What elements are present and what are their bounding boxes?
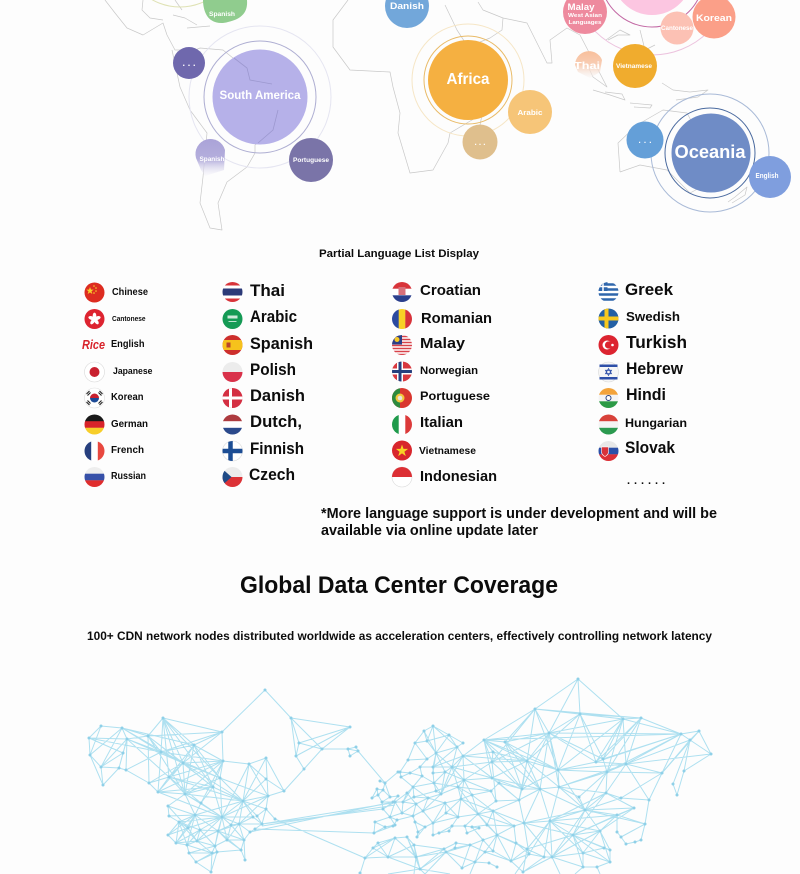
label: Indonesian: Indonesian — [420, 468, 497, 485]
bubble: ellipsis — [173, 47, 205, 79]
subtitle: CDN nodes: 100+ CDN network nodes distributed worldwide as acceleration centers, effectively controlling network latency — [87, 631, 713, 643]
flag: Turkey — [598, 335, 618, 355]
label: Romanian: Romanian — [421, 310, 492, 327]
flag: Finland — [222, 441, 242, 461]
bubble: ellipsis: ... — [474, 138, 486, 147]
footnote — [321, 505, 717, 539]
flag: Japan — [84, 362, 104, 382]
flag: Slovakia — [598, 441, 618, 461]
mark: Rice: Rice — [82, 338, 105, 352]
bubble: Vietnamese — [613, 44, 657, 88]
bubble: Thai — [574, 51, 602, 78]
label: Polish: Polish — [250, 361, 296, 379]
bubble: Malay: West Asian — [568, 13, 602, 19]
flag: China — [84, 282, 104, 302]
bubble group: South America — [173, 26, 333, 182]
bubble: Portuguese — [289, 138, 333, 182]
flag: Norway — [392, 362, 412, 382]
flag: Denmark — [222, 388, 242, 408]
heading: language list: Partial Language List Display — [319, 248, 480, 260]
bubble: Malay: Malay — [568, 2, 595, 13]
label: French: French — [111, 444, 144, 456]
label: Thai: Thai — [250, 282, 285, 300]
label: Greek: Greek — [625, 281, 674, 299]
title: data center coverage: Global Data Center Coverage — [240, 572, 558, 599]
bubble: Spanish: Spanish — [200, 156, 225, 163]
flag: Malaysia — [392, 335, 412, 355]
label: German: German — [111, 418, 148, 430]
bubble group: Africa: Africa — [446, 71, 490, 88]
language column 4 — [598, 281, 687, 487]
label: Arabic: Arabic — [250, 308, 297, 326]
ellipsis: more languages: ...... — [627, 475, 665, 487]
label: Korean: Korean — [111, 391, 144, 403]
label: Swedish: Swedish — [626, 309, 680, 324]
bubble: Portuguese: Portuguese — [293, 157, 329, 164]
flag: Saudi Arabia — [222, 309, 242, 329]
bubble: Vietnamese: Vietnamese — [616, 63, 652, 70]
label: Danish: Danish — [250, 387, 305, 405]
world map outline — [105, 0, 747, 230]
bubble: Korean — [692, 0, 736, 38]
bubble group: Oceania: Oceania — [674, 142, 746, 162]
flag: Netherlands — [222, 414, 242, 435]
bubble: Danish — [385, 0, 429, 28]
flag: Italy — [392, 414, 412, 434]
bubble: Danish: Danish — [390, 1, 424, 12]
label: Malay: Malay — [420, 335, 466, 352]
flag: Croatia — [392, 282, 412, 302]
bubble: English: English — [756, 173, 778, 180]
label: Portuguese: Portuguese — [420, 389, 490, 403]
bubble group: Oceania — [626, 94, 791, 212]
bubble: Spanish (North America): Spanish — [209, 11, 235, 18]
bubble group: North America remnants — [123, 0, 247, 23]
label: Finnish: Finnish — [250, 440, 304, 458]
flag: Greece — [598, 282, 618, 302]
bubble: English — [749, 156, 791, 198]
bubble: Malay — [563, 0, 607, 34]
label: Japanese: Japanese — [113, 366, 152, 377]
label: Chinese: Chinese — [112, 286, 148, 298]
bubble group: Asia — [563, 0, 736, 88]
bubble: ellipsis: ... — [182, 58, 196, 68]
language column 3 — [392, 282, 497, 487]
flag: Hong Kong — [84, 309, 104, 329]
label: Vietnamese: Vietnamese — [419, 445, 476, 457]
flag: Russia — [84, 467, 104, 487]
footnote: available via online update later — [321, 522, 538, 539]
footnote: *More language support is under development and will be — [321, 505, 717, 522]
bubble: Arabic: Arabic — [518, 108, 542, 117]
label: Russian: Russian — [111, 470, 146, 482]
label: Cantonese: Cantonese — [112, 314, 146, 323]
flag: France — [84, 441, 105, 461]
label: Hebrew: Hebrew — [626, 360, 683, 378]
bubble group: South America: South America — [220, 90, 301, 102]
flag: Germany — [84, 414, 104, 435]
flag: Poland — [222, 362, 242, 382]
label: Slovak: Slovak — [625, 439, 676, 457]
bubble: Spanish — [195, 139, 225, 176]
flag: Sweden — [598, 308, 618, 328]
label: Norwegian: Norwegian — [420, 365, 478, 377]
label: Hindi: Hindi — [626, 386, 666, 404]
flag: Israel — [598, 362, 618, 382]
label: Croatian: Croatian — [420, 282, 481, 299]
flag: Indonesia — [392, 467, 412, 487]
bubble: Korean: Korean — [696, 13, 732, 24]
label: Turkish: Turkish — [626, 332, 687, 352]
bubble: Malay: Languages — [568, 20, 602, 26]
flag: Spain — [222, 335, 242, 355]
flag: Hungary — [598, 414, 618, 435]
flag: Portugal — [392, 388, 412, 408]
language column 1 — [82, 282, 152, 487]
label: Czech: Czech — [249, 466, 295, 484]
bubble: Cantonese — [660, 12, 694, 44]
label: Italian: Italian — [420, 414, 463, 431]
network map — [89, 679, 711, 874]
bubble: ellipsis — [626, 122, 664, 158]
bubble: Cantonese: Cantonese — [661, 26, 694, 32]
flag: Vietnam — [392, 440, 412, 460]
label: Spanish: Spanish — [250, 335, 313, 353]
bubble: Thai: Thai — [574, 61, 600, 72]
bubble: ellipsis: ... — [638, 136, 652, 145]
flag: Czech Republic — [222, 467, 242, 487]
flag: Romania — [392, 309, 412, 329]
bubble group: Africa — [412, 24, 552, 160]
label: English: English — [111, 338, 144, 350]
flag: Korea — [84, 388, 104, 408]
flag: Thailand — [222, 282, 242, 302]
language column 2 — [222, 282, 313, 487]
label: Hungarian: Hungarian — [625, 416, 687, 430]
flag: India — [598, 388, 618, 408]
label: Dutch: Dutch, — [250, 413, 302, 431]
